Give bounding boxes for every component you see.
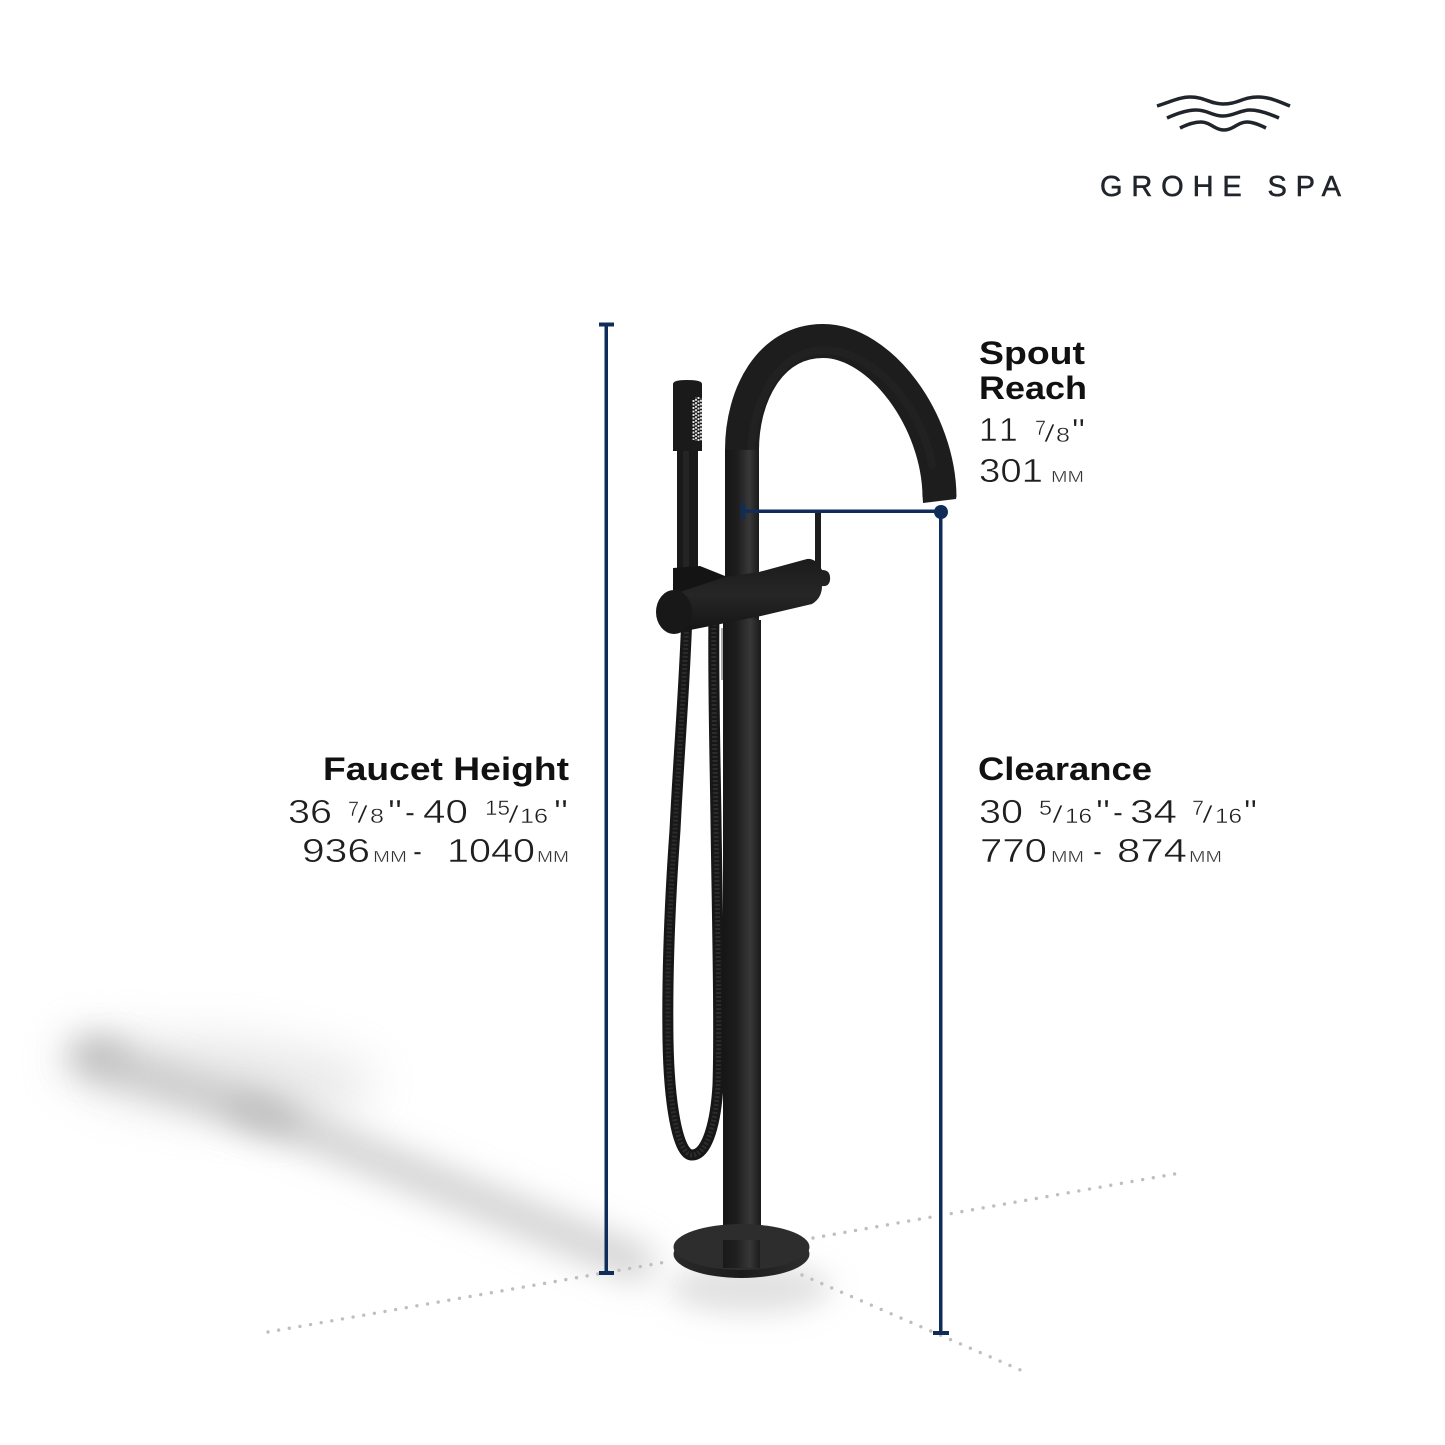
label: faucet height: " [388, 794, 402, 831]
brand name: GROHE SPA [1100, 171, 1342, 203]
label: clearance: 30 [979, 794, 1023, 831]
label: faucet height: 8 [370, 805, 384, 828]
label: spout reach: Reach [979, 370, 1087, 406]
label: spout reach: 8 [1056, 424, 1070, 447]
label: clearance: " [1244, 794, 1257, 831]
label: clearance: 5 [1039, 797, 1052, 820]
label: faucet height [288, 751, 569, 870]
label: faucet height: MM [537, 849, 569, 866]
label: clearance: 7 [1192, 797, 1204, 820]
label: faucet height: 1040 [447, 833, 535, 870]
label: clearance: 770 [980, 833, 1047, 870]
label: clearance: 16 [1215, 805, 1242, 828]
icon: waves [1157, 97, 1290, 130]
label: clearance: / [1052, 801, 1063, 829]
label: faucet height: 7 [348, 798, 359, 821]
end cap [656, 590, 692, 634]
lever [815, 512, 821, 568]
label: clearance: Clearance [978, 751, 1152, 787]
label: clearance: 34 [1130, 794, 1177, 831]
hose [668, 612, 719, 1155]
upper column [725, 450, 759, 620]
label: faucet height: 936 [302, 833, 370, 870]
label: faucet height: 36 [288, 794, 332, 831]
label: faucet height: / [357, 801, 368, 829]
logo: Grohe Spa [1100, 97, 1342, 203]
label: clearance: - [1093, 833, 1102, 870]
dotted floor lines [268, 1173, 1180, 1372]
label: faucet height: " [554, 794, 568, 831]
label: clearance: 16 [1065, 805, 1092, 828]
spout tip [922, 495, 956, 503]
silver rod [721, 628, 723, 680]
base plate [674, 1224, 810, 1278]
label: clearance: 874 [1117, 833, 1187, 870]
hand shower [673, 380, 725, 600]
cast shadow on floor [60, 1035, 832, 1314]
label: faucet height: 15 [485, 797, 510, 820]
label: spout reach: 301 [979, 453, 1043, 490]
label: faucet height: 16 [520, 805, 548, 828]
label: spout reach: 7 [1035, 417, 1046, 440]
label: clearance: / [1202, 801, 1213, 829]
label: faucet height: - [413, 833, 422, 870]
faucet [656, 341, 956, 1278]
dimension line: spout reach and clearance [741, 503, 949, 1335]
lower column [723, 620, 761, 1248]
label: clearance [978, 751, 1257, 870]
label: spout reach: / [1044, 420, 1055, 448]
label: faucet height: 40 [423, 794, 468, 831]
spout [742, 341, 940, 600]
label: spout reach [979, 335, 1087, 490]
label: faucet height: Faucet Height [323, 751, 569, 787]
label: faucet height: / [508, 801, 519, 829]
label: spout reach: 1 [979, 412, 998, 449]
mixer body [680, 559, 830, 632]
label: spout reach: Spout [979, 335, 1085, 371]
label: faucet height: - [405, 794, 415, 831]
label: spout reach: " [1072, 413, 1085, 450]
label: clearance: " [1096, 794, 1110, 831]
label: clearance: MM [1189, 849, 1222, 866]
label: clearance: - [1113, 794, 1123, 831]
label: clearance: MM [1051, 849, 1084, 866]
label: spout reach: MM [1051, 469, 1084, 486]
label: faucet height: MM [373, 849, 407, 866]
label: spout reach: 1 [999, 412, 1018, 449]
dimension line: faucet height [599, 322, 614, 1275]
